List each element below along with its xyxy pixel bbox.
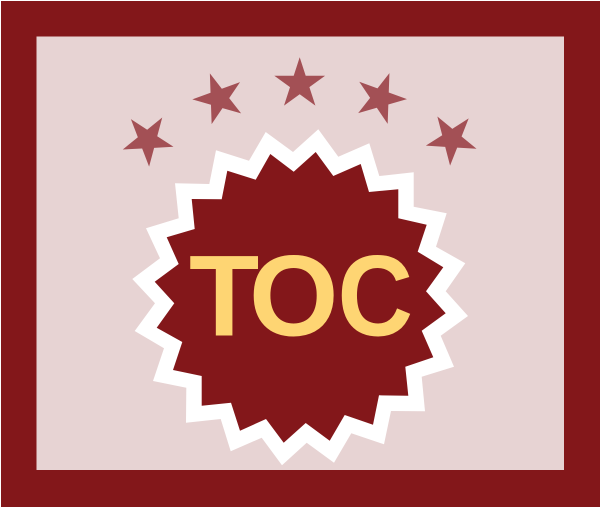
title: TOC: TO xyxy=(189,233,338,361)
badge white outline xyxy=(132,129,468,465)
icon: star 2 xyxy=(186,65,250,127)
icon: star 1 xyxy=(115,104,184,172)
icon: arc of five stars xyxy=(115,57,488,172)
icon: star 5 xyxy=(418,102,488,172)
icon: star 4 xyxy=(349,64,413,127)
title: TOC xyxy=(189,232,413,361)
badge dark red starburst xyxy=(155,152,446,443)
title: TOC: C xyxy=(338,232,413,361)
panel: light pink background xyxy=(36,36,564,470)
icon: star 3 xyxy=(274,57,325,106)
badge: starburst seal with TOC xyxy=(132,129,468,465)
